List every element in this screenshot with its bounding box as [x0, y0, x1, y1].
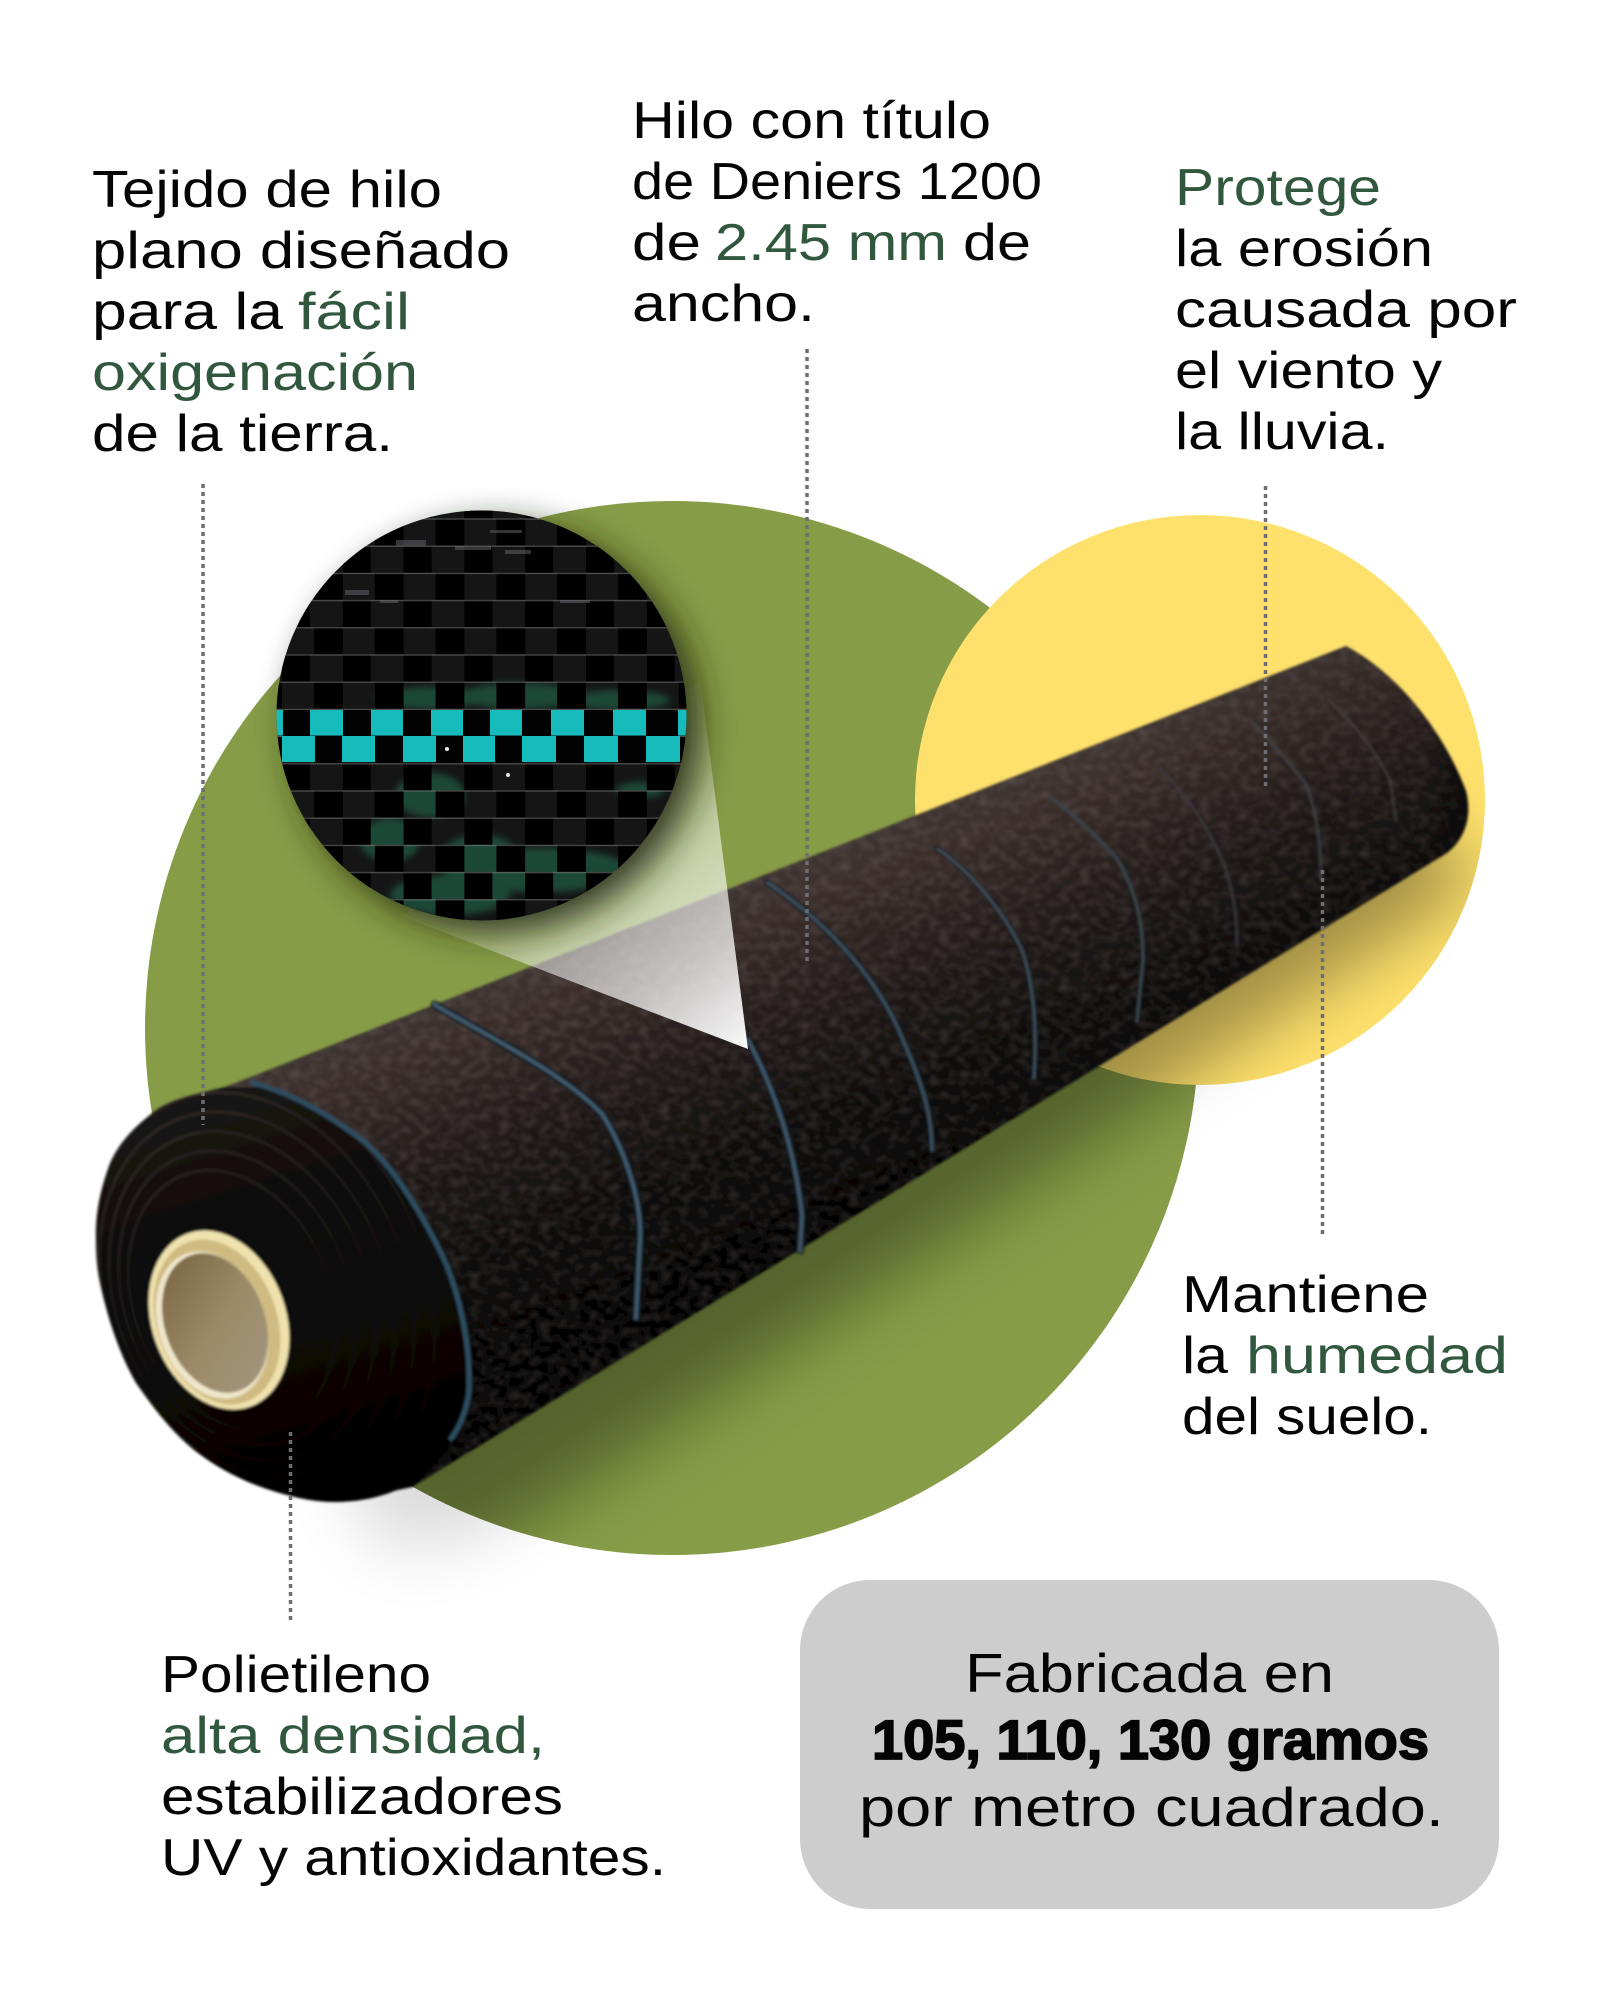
- text block: thread: [632, 92, 1042, 333]
- yellow background circle: [915, 515, 1485, 1085]
- glossy highlights: [345, 530, 590, 603]
- blue cap edge stripe: [250, 1082, 469, 1440]
- dotted leader: moisture: [1321, 870, 1324, 1237]
- text block: thread: de Deniers 1200: [632, 153, 1042, 211]
- green background circle: [145, 501, 1199, 1555]
- text block: polyethylene: Polietileno: [161, 1646, 431, 1704]
- text block: erosion: [1175, 159, 1517, 461]
- dotted leader: weave: [201, 484, 205, 1125]
- roll stripes: [435, 700, 1396, 1318]
- turquoise band: [272, 710, 690, 762]
- green mottling: [360, 683, 670, 915]
- text block: polyethylene: estabilizadores: [161, 1768, 563, 1826]
- text block: weave: fácil: [298, 283, 410, 341]
- text block: erosion: la erosión: [1175, 220, 1433, 278]
- dotted leader: erosion: [1264, 486, 1267, 786]
- text block: weave: [92, 161, 510, 463]
- text block: erosion: la lluvia.: [1175, 403, 1389, 461]
- roll texture: [220, 640, 1480, 1510]
- text block: thread: ancho.: [632, 275, 815, 333]
- right end shading: [225, 646, 1468, 1502]
- text block: weave: plano diseñado: [92, 222, 510, 280]
- text block: moisture: [1182, 1266, 1508, 1446]
- text block: erosion: el viento y: [1175, 342, 1442, 400]
- text block: moisture: humedad: [1246, 1327, 1508, 1385]
- text block: moisture: Mantiene: [1182, 1266, 1429, 1324]
- magnifier: woven fabric close-up: [270, 500, 700, 930]
- fabric roll: [94, 644, 1470, 1504]
- callout panel: [800, 1580, 1499, 1909]
- text block: moisture: del suelo.: [1182, 1388, 1432, 1446]
- text block: polyethylene: [161, 1646, 666, 1887]
- text block: weave: Tejido de hilo: [92, 161, 442, 219]
- roll front cap: [96, 1087, 469, 1502]
- white specks: [445, 747, 449, 751]
- weave pattern: [270, 500, 700, 930]
- callout: grams per square metre: 105, 110, 130 gramos: [872, 1708, 1429, 1771]
- magnifier shadow: [291, 523, 701, 933]
- callout: grams per square metre: por metro cuadrado.: [859, 1776, 1444, 1838]
- roll body: [225, 646, 1468, 1502]
- cap winding rings: [96, 1088, 440, 1493]
- callout: grams per square metre: Fabricada en: [965, 1642, 1334, 1704]
- text block: thread: de: [632, 214, 701, 272]
- dotted leader: thread: [805, 349, 809, 963]
- text block: thread: Hilo con título: [632, 92, 991, 150]
- callout: grams per square metre: [800, 1580, 1499, 1909]
- text block: weave: de la tierra.: [92, 405, 393, 463]
- soft shadow of the roll on the circles: [412, 812, 1484, 1542]
- text block: erosion: causada por: [1175, 281, 1517, 339]
- text block: polyethylene: alta densidad,: [161, 1707, 545, 1765]
- text block: polyethylene: UV y antioxidantes.: [161, 1829, 666, 1887]
- faint shadow of the roll on white: [330, 860, 1420, 1550]
- magnifier light cone: [401, 679, 748, 1049]
- dotted leader: polyethylene: [289, 1432, 292, 1622]
- dark cells between band squares: [283, 710, 678, 762]
- text block: erosion: Protege: [1175, 159, 1381, 217]
- text block: weave: oxigenación: [92, 344, 418, 402]
- cardboard core: [125, 1211, 313, 1429]
- text block: thread: 2.45 mm: [715, 214, 947, 272]
- text block: weave: para la: [92, 283, 283, 341]
- text block: moisture: la: [1182, 1327, 1228, 1385]
- text block: thread: de: [963, 214, 1031, 272]
